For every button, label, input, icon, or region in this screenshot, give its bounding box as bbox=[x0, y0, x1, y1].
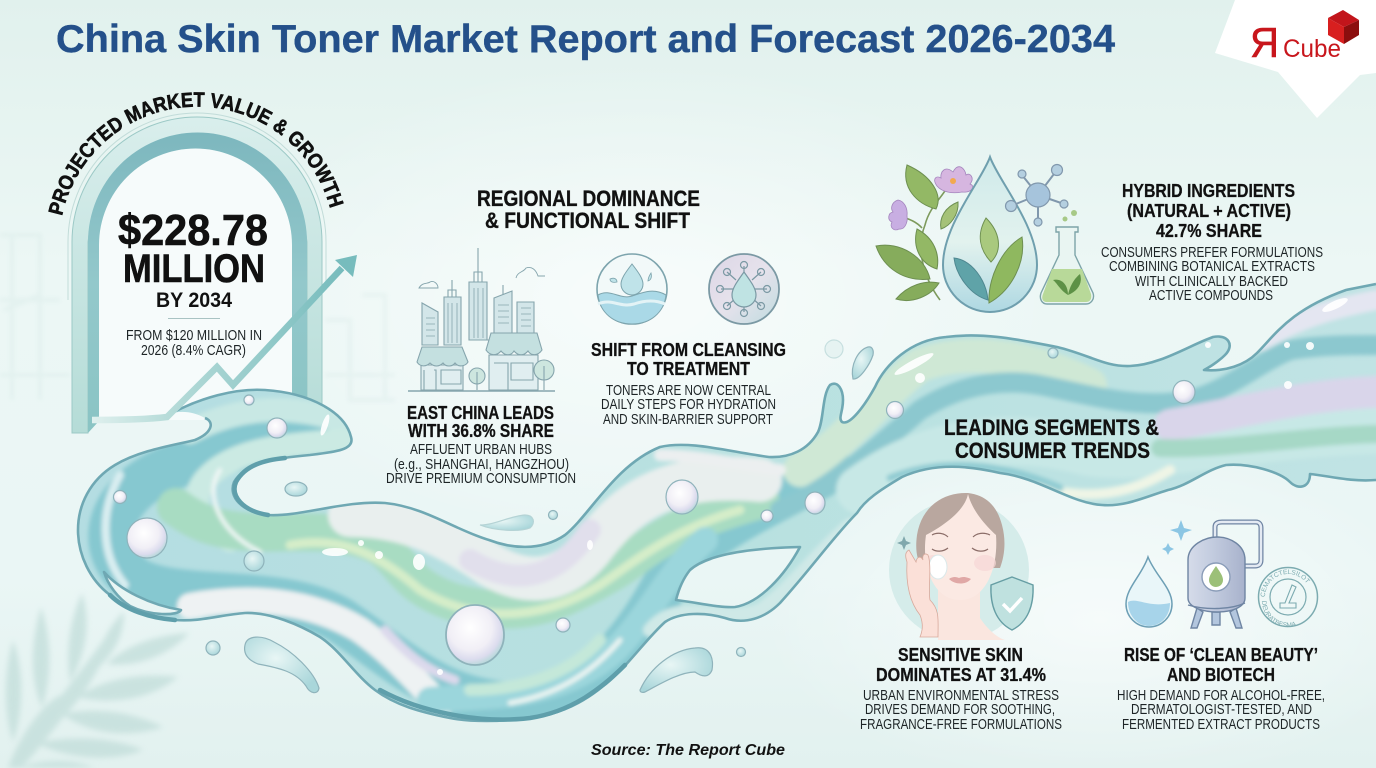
text: hybrid ingredients: COMBINING BOTANICAL EXTRACTS bbox=[1109, 259, 1315, 275]
text: east china leads: WITH 36.8% SHARE bbox=[408, 420, 554, 441]
text: sensitive skin: DRIVES DEMAND FOR SOOTHING, bbox=[865, 702, 1055, 718]
icon: bioreactor tank bbox=[1188, 522, 1261, 628]
icon: certification stamp: DEURATBESMA bbox=[1262, 601, 1296, 628]
text: sensitive skin: SENSITIVE SKIN bbox=[898, 644, 1023, 665]
curved heading: projected market value and growth: PROJECTED MARKET VALUE & GROWTH bbox=[48, 92, 344, 216]
text: sensitive skin: DOMINATES AT 31.4% bbox=[876, 664, 1046, 685]
text: sensitive skin bbox=[860, 644, 1062, 733]
heading: leading segments and consumer trends: LEADING SEGMENTS & bbox=[944, 415, 1159, 440]
text: rise of clean beauty: HIGH DEMAND FOR ALCOHOL-FREE, bbox=[1117, 688, 1325, 704]
icon: molecule circle bbox=[709, 254, 779, 324]
heading: leading segments and consumer trends: CONSUMER TRENDS bbox=[955, 438, 1150, 463]
text: hybrid ingredients: ACTIVE COMPOUNDS bbox=[1149, 288, 1273, 304]
heading: regional dominance and functional shift bbox=[477, 186, 700, 233]
heading: regional dominance and functional shift: & FUNCTIONAL SHIFT bbox=[485, 208, 690, 233]
market value figures: FROM $120 MILLION IN bbox=[126, 328, 262, 344]
text: hybrid ingredients: HYBRID INGREDIENTS bbox=[1122, 180, 1295, 201]
heading: leading segments and consumer trends bbox=[944, 415, 1159, 463]
text: rise of clean beauty: FERMENTED EXTRACT PRODUCTS bbox=[1122, 717, 1320, 733]
bubbles and droplets bbox=[114, 340, 1195, 693]
market value figures: BY 2034 bbox=[156, 289, 232, 312]
liquid ribbon bbox=[60, 270, 1376, 730]
text: east china leads: AFFLUENT URBAN HUBS bbox=[410, 442, 552, 458]
text: shift from cleansing to treatment: AND SKIN-BARRIER SUPPORT bbox=[603, 412, 773, 428]
icon: face with shield bbox=[889, 493, 1033, 640]
growth arrow bbox=[92, 255, 357, 420]
text: hybrid ingredients: WITH CLINICALLY BACKED bbox=[1135, 274, 1288, 290]
logo: RCube: Я bbox=[1250, 19, 1279, 66]
arch bbox=[68, 113, 326, 433]
text: east china leads: EAST CHINA LEADS bbox=[407, 402, 554, 423]
text: rise of clean beauty: RISE OF ‘CLEAN BEAUTY’ bbox=[1124, 644, 1318, 665]
text: shift from cleansing to treatment: TONERS ARE NOW CENTRAL bbox=[606, 383, 771, 399]
icon: sparkles bbox=[1162, 520, 1192, 555]
icon: botanical drop with molecule and flask bbox=[876, 157, 1094, 312]
text: rise of clean beauty: DERMATOLOGIST-TESTED, AND bbox=[1131, 702, 1312, 718]
title: China Skin Toner Market Report and Forecast 2026-2034 bbox=[56, 18, 1115, 61]
heading: regional dominance and functional shift: REGIONAL DOMINANCE bbox=[477, 186, 700, 211]
icon: water circle bbox=[597, 254, 667, 324]
text: shift from cleansing to treatment: TO TREATMENT bbox=[627, 358, 751, 379]
icon: certification stamp bbox=[1258, 566, 1318, 628]
text: shift from cleansing to treatment: SHIFT FROM CLEANSING bbox=[591, 339, 786, 360]
logo: RCube bbox=[1215, 0, 1376, 118]
text: rise of clean beauty bbox=[1117, 644, 1325, 733]
source note: Source: The Report Cube bbox=[591, 742, 785, 759]
logo: RCube: Cube bbox=[1283, 35, 1341, 63]
text: hybrid ingredients: CONSUMERS PREFER FORMULATIONS bbox=[1101, 245, 1323, 261]
market value figures: 2026 (8.4% CAGR) bbox=[141, 343, 246, 359]
icon: water drop bbox=[1126, 557, 1172, 627]
market value figures: $228.78 bbox=[118, 206, 268, 255]
text: shift from cleansing to treatment bbox=[591, 339, 786, 428]
icon: certification stamp: CEMATCTELSILOT bbox=[1260, 570, 1310, 597]
icon: city skyline with shops bbox=[408, 248, 555, 391]
text: hybrid ingredients: 42.7% SHARE bbox=[1156, 220, 1262, 241]
market value figures: MILLION bbox=[123, 247, 265, 291]
text: east china leads bbox=[386, 402, 576, 487]
text: shift from cleansing to treatment: DAILY STEPS FOR HYDRATION bbox=[601, 397, 776, 413]
text: sensitive skin: FRAGRANCE-FREE FORMULATIONS bbox=[860, 717, 1062, 733]
text: hybrid ingredients bbox=[1101, 180, 1323, 304]
text: hybrid ingredients: (NATURAL + ACTIVE) bbox=[1127, 200, 1291, 221]
text: east china leads: DRIVE PREMIUM CONSUMPTION bbox=[386, 471, 576, 487]
market value figures bbox=[118, 206, 268, 359]
text: sensitive skin: URBAN ENVIRONMENTAL STRESS bbox=[863, 688, 1059, 704]
text: rise of clean beauty: AND BIOTECH bbox=[1167, 664, 1275, 685]
text: east china leads: (e.g., SHANGHAI, HANGZHOU) bbox=[394, 457, 569, 473]
